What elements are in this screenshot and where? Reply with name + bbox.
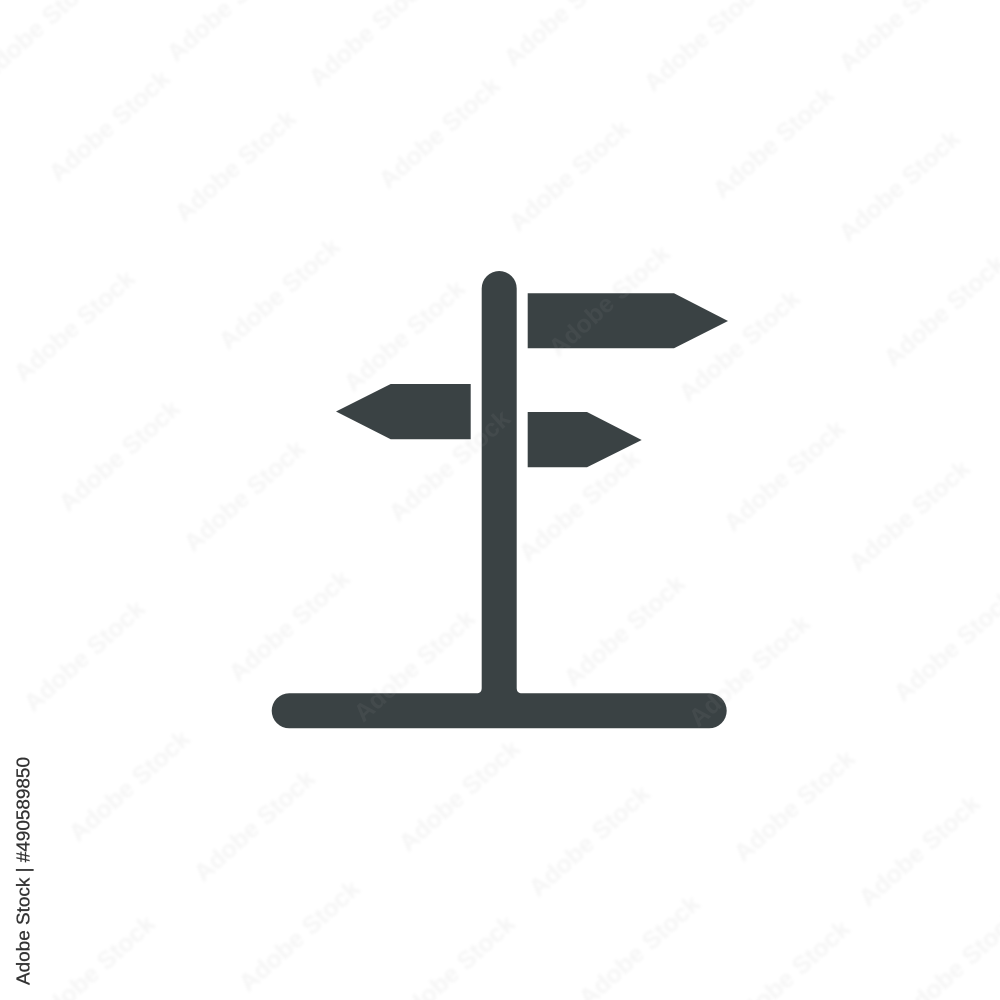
watermark halo pattern: Adobe Stock [384, 404, 516, 528]
arrow sign: lower right [528, 412, 642, 467]
watermark halo pattern: Adobe Stock [64, 724, 196, 848]
watermark halo pattern: Adobe Stock [834, 124, 966, 248]
watermark over icon [357, 294, 724, 728]
watermark halo pattern: Adobe Stock [214, 232, 346, 356]
arrow sign: left [336, 384, 471, 439]
watermark halo pattern: Adobe Stock [374, 71, 506, 195]
watermark halo pattern: Adobe Stock [504, 114, 636, 238]
watermark halo pattern: Adobe Stock [234, 874, 366, 998]
watermark halo pattern: Adobe Stock [729, 744, 861, 868]
watermark halo pattern: Adobe Stock [189, 764, 321, 888]
stock id credit: Adobe Stock | #490589850 [12, 757, 34, 985]
watermark over icon: Adobe Stock [349, 604, 481, 728]
watermark halo pattern: Adobe Stock [524, 779, 656, 903]
watermark halo pattern: Adobe Stock [339, 274, 471, 398]
watermark halo pattern: Adobe Stock [224, 564, 356, 688]
watermark halo pattern: Adobe Stock [719, 414, 851, 538]
watermark halo pattern: Adobe Stock [349, 604, 481, 728]
watermark halo pattern: Adobe Stock [19, 594, 151, 718]
watermark halo pattern: Adobe Stock [179, 434, 311, 558]
watermark halo pattern: Adobe Stock [54, 394, 186, 518]
watermark over icon: Adobe Stock [339, 274, 471, 398]
watermark halo pattern: Adobe Stock [44, 64, 176, 188]
watermark halo pattern: Adobe Stock [844, 454, 976, 578]
watermark over icon: Adobe Stock [384, 404, 516, 528]
arrow sign: top right [528, 293, 728, 348]
watermark over icon: Adobe Stock [514, 444, 646, 568]
watermark over icon: Adobe Stock [684, 609, 816, 733]
watermark halo pattern: Adobe Stock [559, 569, 691, 693]
watermark halo pattern: Adobe Stock [514, 444, 646, 568]
watermark over icon: Adobe Stock [544, 239, 676, 363]
watermark halo pattern: Adobe Stock [544, 239, 676, 363]
watermark halo pattern: Adobe Stock [674, 284, 806, 408]
watermark halo pattern: Adobe Stock [394, 734, 526, 858]
icon: signpost [272, 271, 728, 728]
signpost pole and base [272, 271, 727, 728]
watermark halo pattern: Adobe Stock [684, 609, 816, 733]
watermark halo pattern: Adobe Stock [170, 104, 302, 228]
watermark halo pattern: Adobe Stock [854, 789, 986, 913]
watermark halo pattern: Adobe Stock [9, 264, 141, 388]
watermark halo pattern: Adobe Stock [708, 81, 840, 205]
